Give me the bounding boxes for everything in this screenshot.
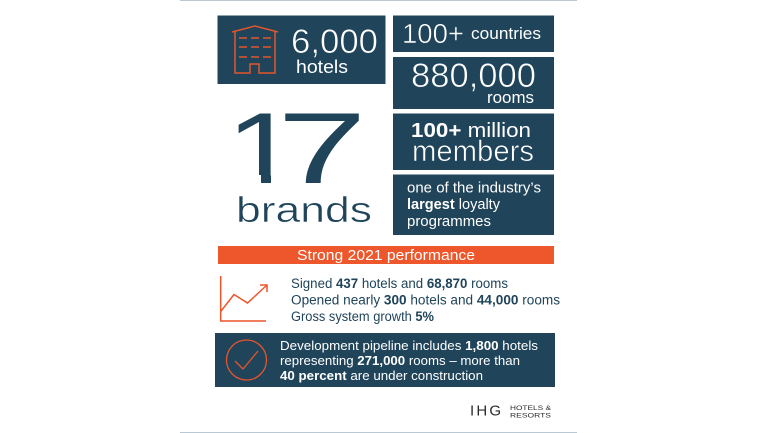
label: brands: brands [236, 189, 372, 230]
panel: development pipeline [215, 333, 555, 387]
number: 17: 7 [277, 92, 367, 205]
text: signed: Signed 437 hotels and 68,870 rooms [291, 276, 508, 291]
text: pipeline line 2: representing 271,000 rooms – more than [280, 353, 520, 368]
number: 17: 1 [226, 92, 299, 205]
panel: loyalty programmes [393, 174, 554, 235]
panel: 6,000 hotels [218, 16, 386, 84]
icon: hotel building [232, 26, 278, 73]
text: loyalty line 3: programmes [407, 213, 491, 230]
text: loyalty line 2: largest loyalty [407, 196, 500, 213]
text: growth: Gross system growth 5% [291, 309, 434, 324]
stat: 17 brands [226, 92, 372, 230]
label: members: members [412, 135, 534, 168]
label: 100+ million: 100+ million [411, 120, 531, 142]
stat: 880,000: 880,000 [411, 57, 536, 95]
panel: 100+ million members [393, 114, 554, 170]
logo text: resorts: RESORTS [510, 412, 552, 420]
logo text: hotels &: HOTELS & [510, 405, 552, 412]
text: opened: Opened nearly 300 hotels and 44,000 rooms [291, 292, 560, 308]
logo: IHG Hotels & Resorts [470, 402, 552, 420]
panel: 100+ countries [393, 16, 554, 52]
text: pipeline line 3: 40 percent are under construction [280, 368, 483, 383]
stat: 100+: 100+ [402, 18, 464, 49]
label: countries: countries [471, 24, 541, 43]
stat: 6,000: 6,000 [291, 23, 378, 61]
label: rooms: rooms [487, 88, 534, 107]
text block: 2021 performance stats [291, 276, 560, 324]
icon: check circle [226, 340, 266, 380]
text: loyalty line 1: one of the industry’s [407, 180, 541, 196]
icon: growth line chart [221, 276, 267, 321]
label: hotels: hotels [296, 57, 348, 77]
panel: 880,000 rooms [393, 57, 554, 109]
logo mark: IHG: IHG [470, 402, 503, 420]
banner: Strong 2021 performance [218, 246, 554, 264]
banner: Strong 2021 performance: Strong 2021 performance [297, 248, 475, 264]
text: pipeline line 1: Development pipeline includes 1,800 hotels [280, 338, 539, 353]
number: 17 [226, 92, 367, 205]
